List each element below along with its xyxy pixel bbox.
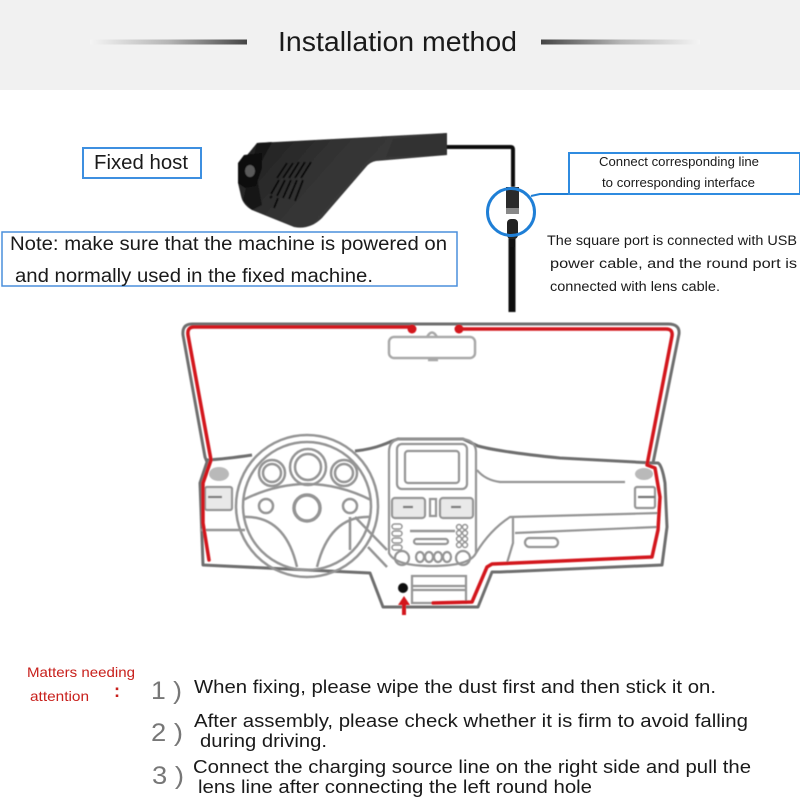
step 3 <box>152 756 751 797</box>
red mount points <box>408 324 464 334</box>
matters needing attention label: Matters needing <box>27 664 135 680</box>
step 1: 1 ) <box>151 677 182 705</box>
header band <box>0 0 800 90</box>
centre console <box>389 439 476 603</box>
port description <box>547 233 797 294</box>
port description: The square port is connected with USB <box>547 233 797 248</box>
port description: connected with lens cable. <box>550 279 720 294</box>
title: Installation method <box>278 26 517 57</box>
matters needing attention label: attention <box>30 688 89 704</box>
passenger dash panels <box>205 467 660 563</box>
red arrow <box>398 596 410 615</box>
callout: connect corresponding line: to corresponding interface <box>602 176 755 190</box>
matters needing attention label: : <box>114 681 120 701</box>
car dashboard diagram <box>183 324 679 615</box>
windshield and dashboard outline <box>183 324 679 607</box>
note box: Note: make sure that the machine is powered on <box>10 234 447 255</box>
port description: power cable, and the round port is <box>550 256 797 271</box>
step 2 <box>151 710 748 751</box>
callout: connect corresponding line: Connect corresponding line <box>599 155 759 169</box>
note box <box>2 232 457 287</box>
step 2: during driving. <box>200 730 327 751</box>
step 2: After assembly, please check whether it is firm to avoid falling <box>194 710 748 731</box>
red cable route <box>188 327 672 603</box>
label: fixed host <box>83 148 201 178</box>
cable from camera to connector <box>445 147 513 312</box>
step 3: 3 ) <box>152 762 184 790</box>
connector with highlight circle <box>488 187 570 247</box>
callout: connect corresponding line <box>569 153 800 194</box>
icon: dash camera host <box>238 133 447 228</box>
step 3: lens line after connecting the left round hole <box>198 776 592 797</box>
step 3: Connect the charging source line on the right side and pull the <box>193 756 751 777</box>
label: fixed host: Fixed host <box>94 152 188 174</box>
rear-view mirror <box>389 332 475 360</box>
step 1: When fixing, please wipe the dust first and then stick it on. <box>194 676 716 697</box>
step 1 <box>151 676 716 705</box>
power port hole <box>398 583 408 593</box>
step 2: 2 ) <box>151 719 183 747</box>
note box: and normally used in the fixed machine. <box>15 266 373 287</box>
steering wheel <box>200 435 387 577</box>
matters needing attention label <box>27 664 135 704</box>
